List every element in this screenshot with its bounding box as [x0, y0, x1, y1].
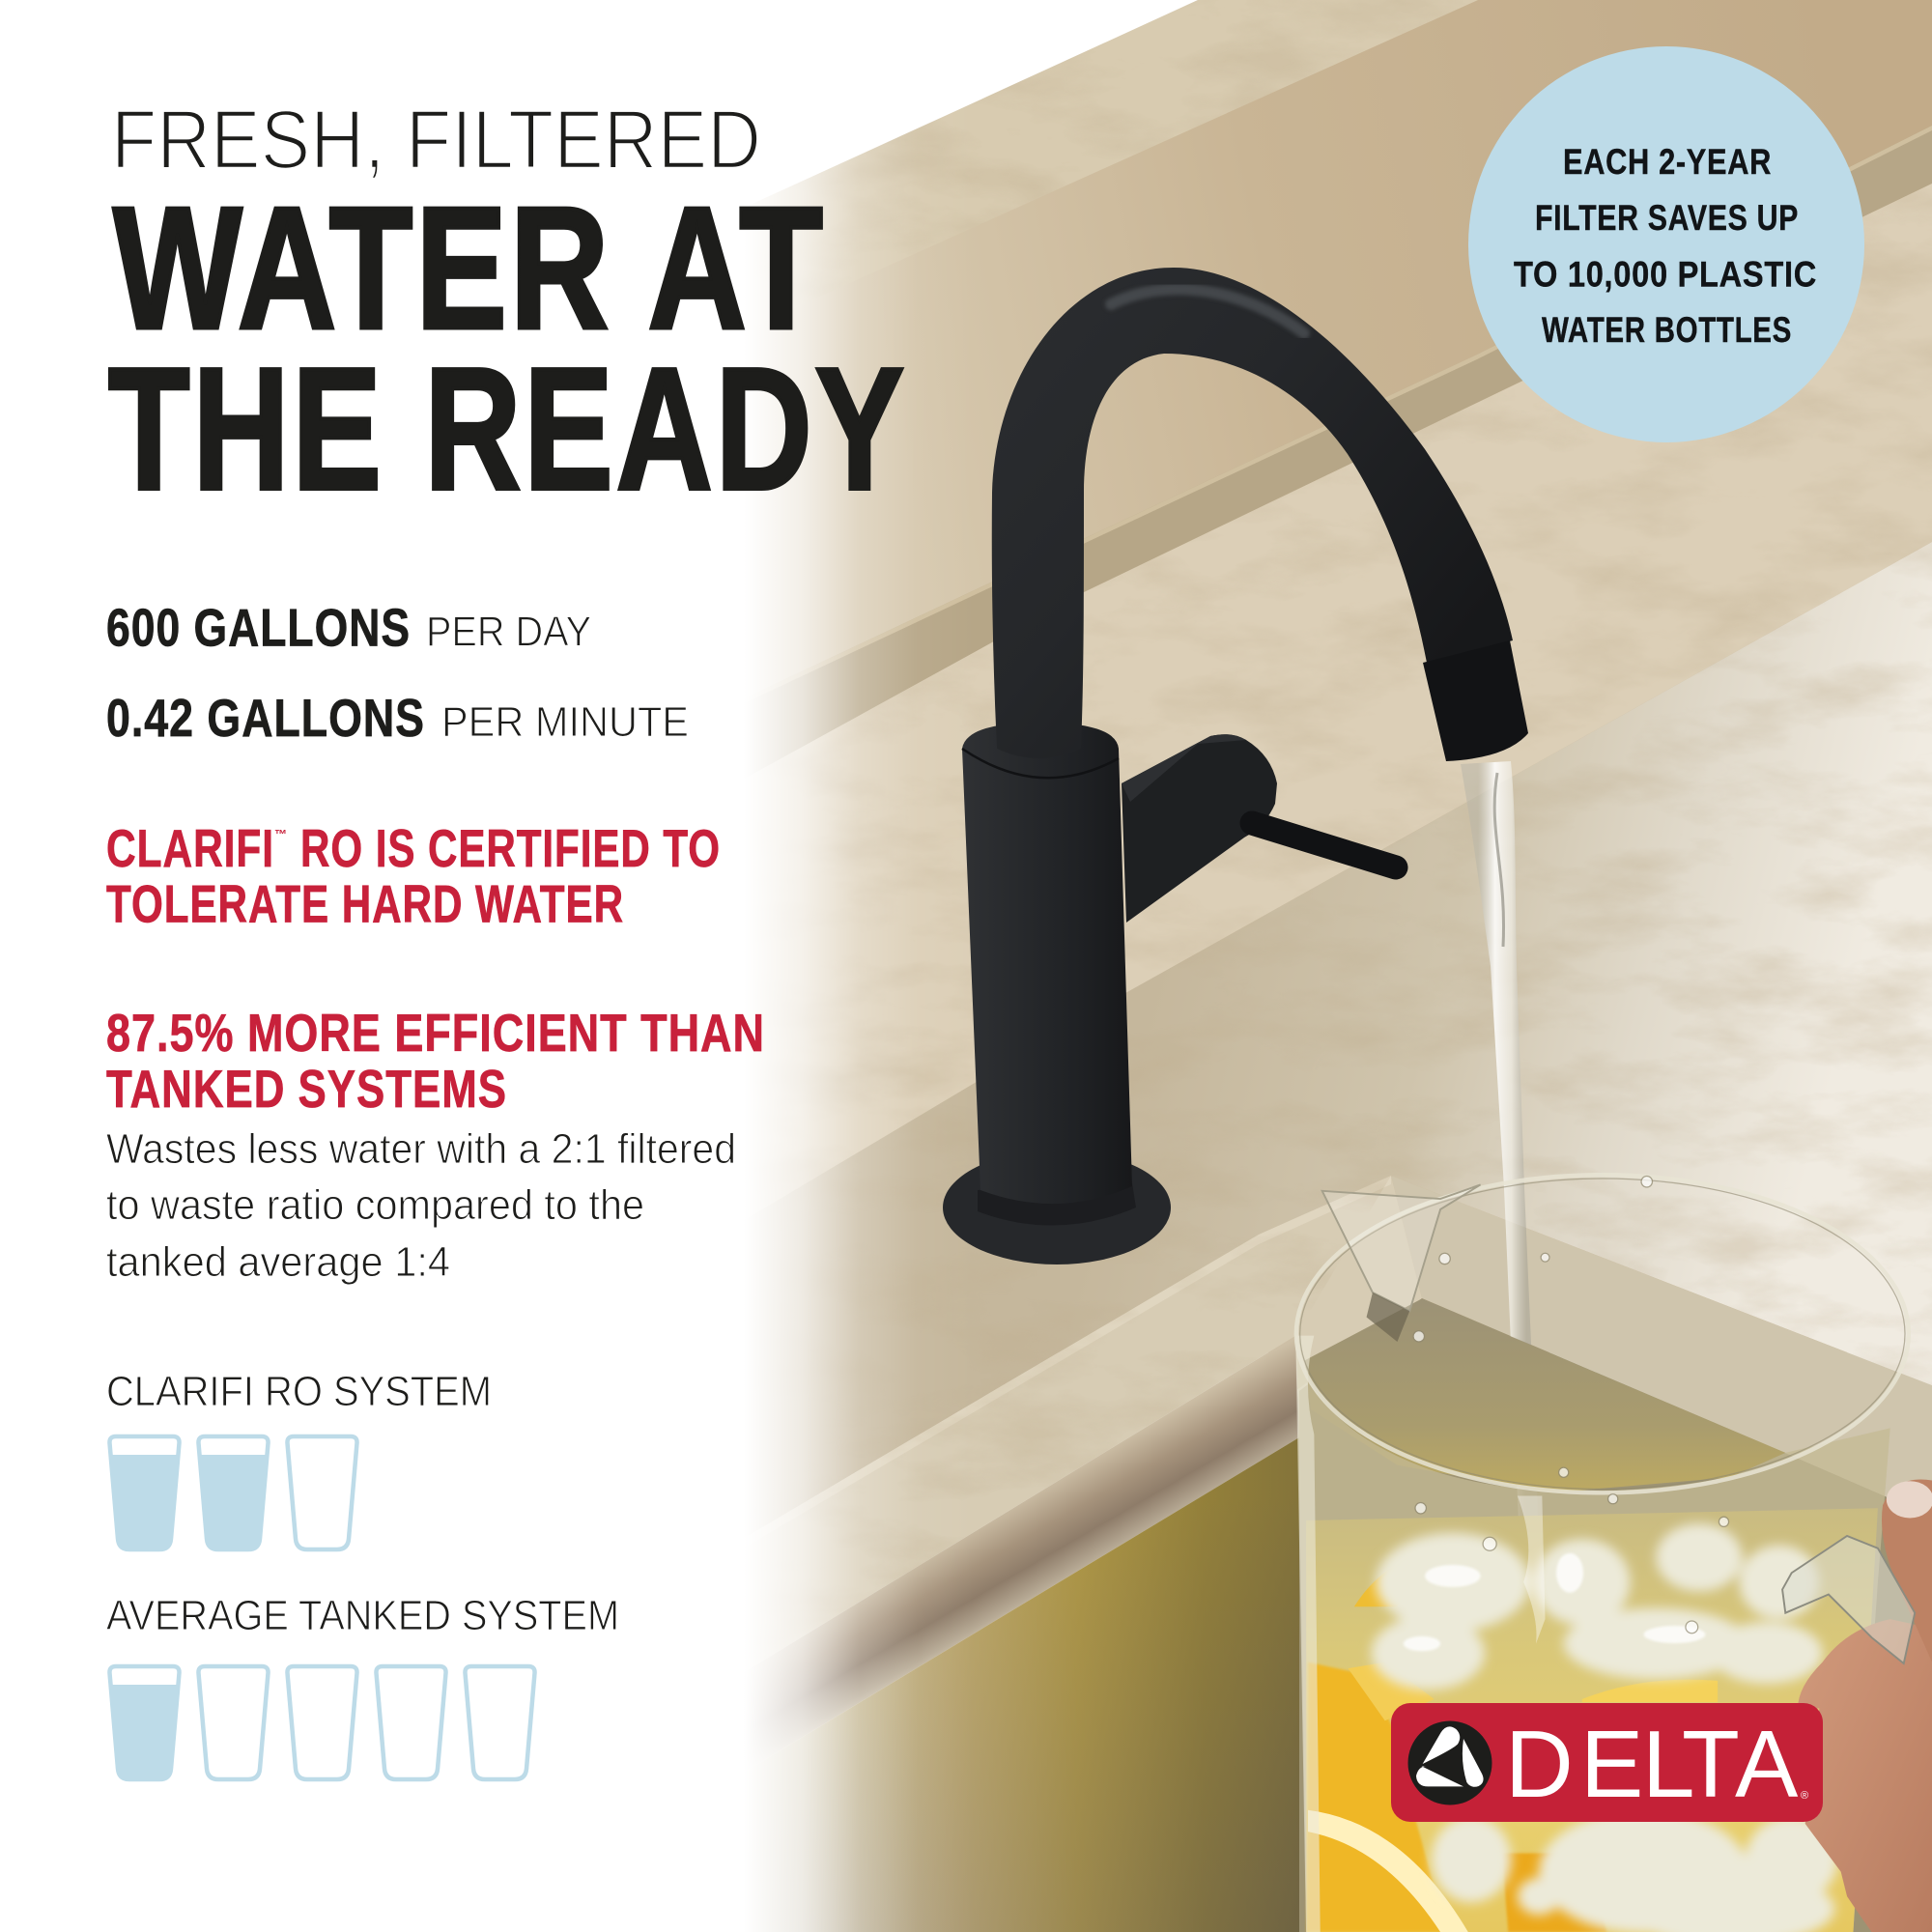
red callout: efficiency [106, 1003, 765, 1119]
thumb [1882, 1480, 1932, 1662]
counter lip [676, 1336, 1299, 1813]
pitcher lower wall [1296, 1342, 1890, 1932]
pitcher interior back [1305, 1298, 1785, 1492]
glasses: clarifi ratio, two full one empty [109, 1436, 357, 1551]
palm [1798, 1619, 1932, 1932]
efficiency description text: Wastes less water with a 2:1 filtered [106, 1125, 736, 1173]
red callout: hard water certification: RO IS CERTIFIED TO [300, 818, 721, 878]
pitcher rim [1296, 1175, 1909, 1492]
efficiency description text [106, 1125, 736, 1286]
red callout: efficiency: TANKED SYSTEMS [106, 1059, 507, 1119]
red callout: hard water certification: ™ [274, 827, 288, 841]
glasses: tanked ratio, one full four empty [109, 1666, 535, 1781]
upper marble strip [676, 0, 1478, 361]
efficiency description text: to waste ratio compared to the [106, 1181, 644, 1229]
flow rate: 0.42 gallons per minute: 0.42 GALLONS [106, 688, 425, 748]
icon: delta triangle mark [1408, 1721, 1492, 1804]
red callout: hard water certification: TOLERATE HARD WATER [106, 873, 624, 933]
faucet spout [992, 268, 1513, 758]
efficiency description text: tanked average 1:4 [106, 1238, 450, 1286]
water stream [1461, 761, 1540, 1642]
red callout: efficiency: 87.5% MORE EFFICIENT THAN [106, 1003, 765, 1063]
pitcher spout [1322, 1184, 1481, 1311]
faucet nozzle [1423, 640, 1528, 761]
thumbnail [1887, 1481, 1932, 1518]
flow rate: 600 gallons per day: 600 GALLONS [106, 597, 411, 657]
callout: blue circle with filter savings: FILTER SAVES UP [1535, 197, 1799, 238]
counter far front face [1391, 1176, 1932, 1517]
registered mark: ® [1801, 1790, 1808, 1802]
backsplash ledge [676, 126, 1932, 816]
label: average tanked system: AVERAGE TANKED SYSTEM [106, 1592, 619, 1639]
basin seen behind pitcher [1299, 1298, 1932, 1932]
faucet handle body [1122, 734, 1277, 923]
red callout: hard water certification: CLARIFI [106, 818, 274, 878]
faucet [943, 268, 1528, 1264]
flow rate: 0.42 gallons per minute [106, 688, 689, 748]
pitcher left glass wall [1295, 1336, 1321, 1932]
red callout: hard water certification [106, 818, 721, 933]
lemons [1307, 1546, 1718, 1932]
delta wordmark: DELTA [1505, 1711, 1799, 1817]
title line 2: WATER AT [113, 172, 826, 365]
callout: blue circle with filter savings: TO 10,000 PLASTIC [1514, 253, 1817, 294]
hand holding pitcher [1782, 1480, 1932, 1932]
title line 1: FRESH, FILTERED [111, 94, 761, 186]
flow rate: 0.42 gallons per minute: PER MINUTE [441, 698, 689, 746]
sink basin [676, 1437, 1323, 1932]
pitcher with lemon water [1295, 1175, 1909, 1932]
water droplets [1413, 1176, 1729, 1634]
title line 3: THE READY [108, 332, 907, 526]
ice highlights [1404, 1553, 1705, 1651]
marble backsplash [676, 184, 1932, 1261]
title: fresh, filtered water at the ready [108, 94, 907, 526]
faucet main cylinder [962, 723, 1132, 1204]
delta logo badge [1391, 1703, 1823, 1822]
faucet flange base [943, 1151, 1171, 1264]
callout: blue circle with filter savings [1468, 46, 1864, 442]
counter front edge [676, 1176, 1422, 1714]
marble veining [840, 0, 1932, 1573]
callout: blue circle with filter savings: EACH 2-YEAR [1563, 141, 1772, 182]
white fade over photo [0, 0, 976, 1932]
stream inside pitcher [1518, 1496, 1546, 1644]
pitcher handle [1782, 1536, 1915, 1663]
label: clarifi ro system: CLARIFI RO SYSTEM [106, 1368, 492, 1415]
flow rate: 600 gallons per day: PER DAY [426, 609, 591, 655]
countertop surface [676, 542, 1932, 1578]
wall [676, 0, 1932, 1352]
kitchen photo background [676, 0, 1932, 1932]
lemon water [1306, 1508, 1878, 1932]
faucet lever [1252, 823, 1396, 867]
callout: blue circle with filter savings: WATER BOTTLES [1542, 309, 1792, 350]
ice cubes [1372, 1523, 1837, 1932]
